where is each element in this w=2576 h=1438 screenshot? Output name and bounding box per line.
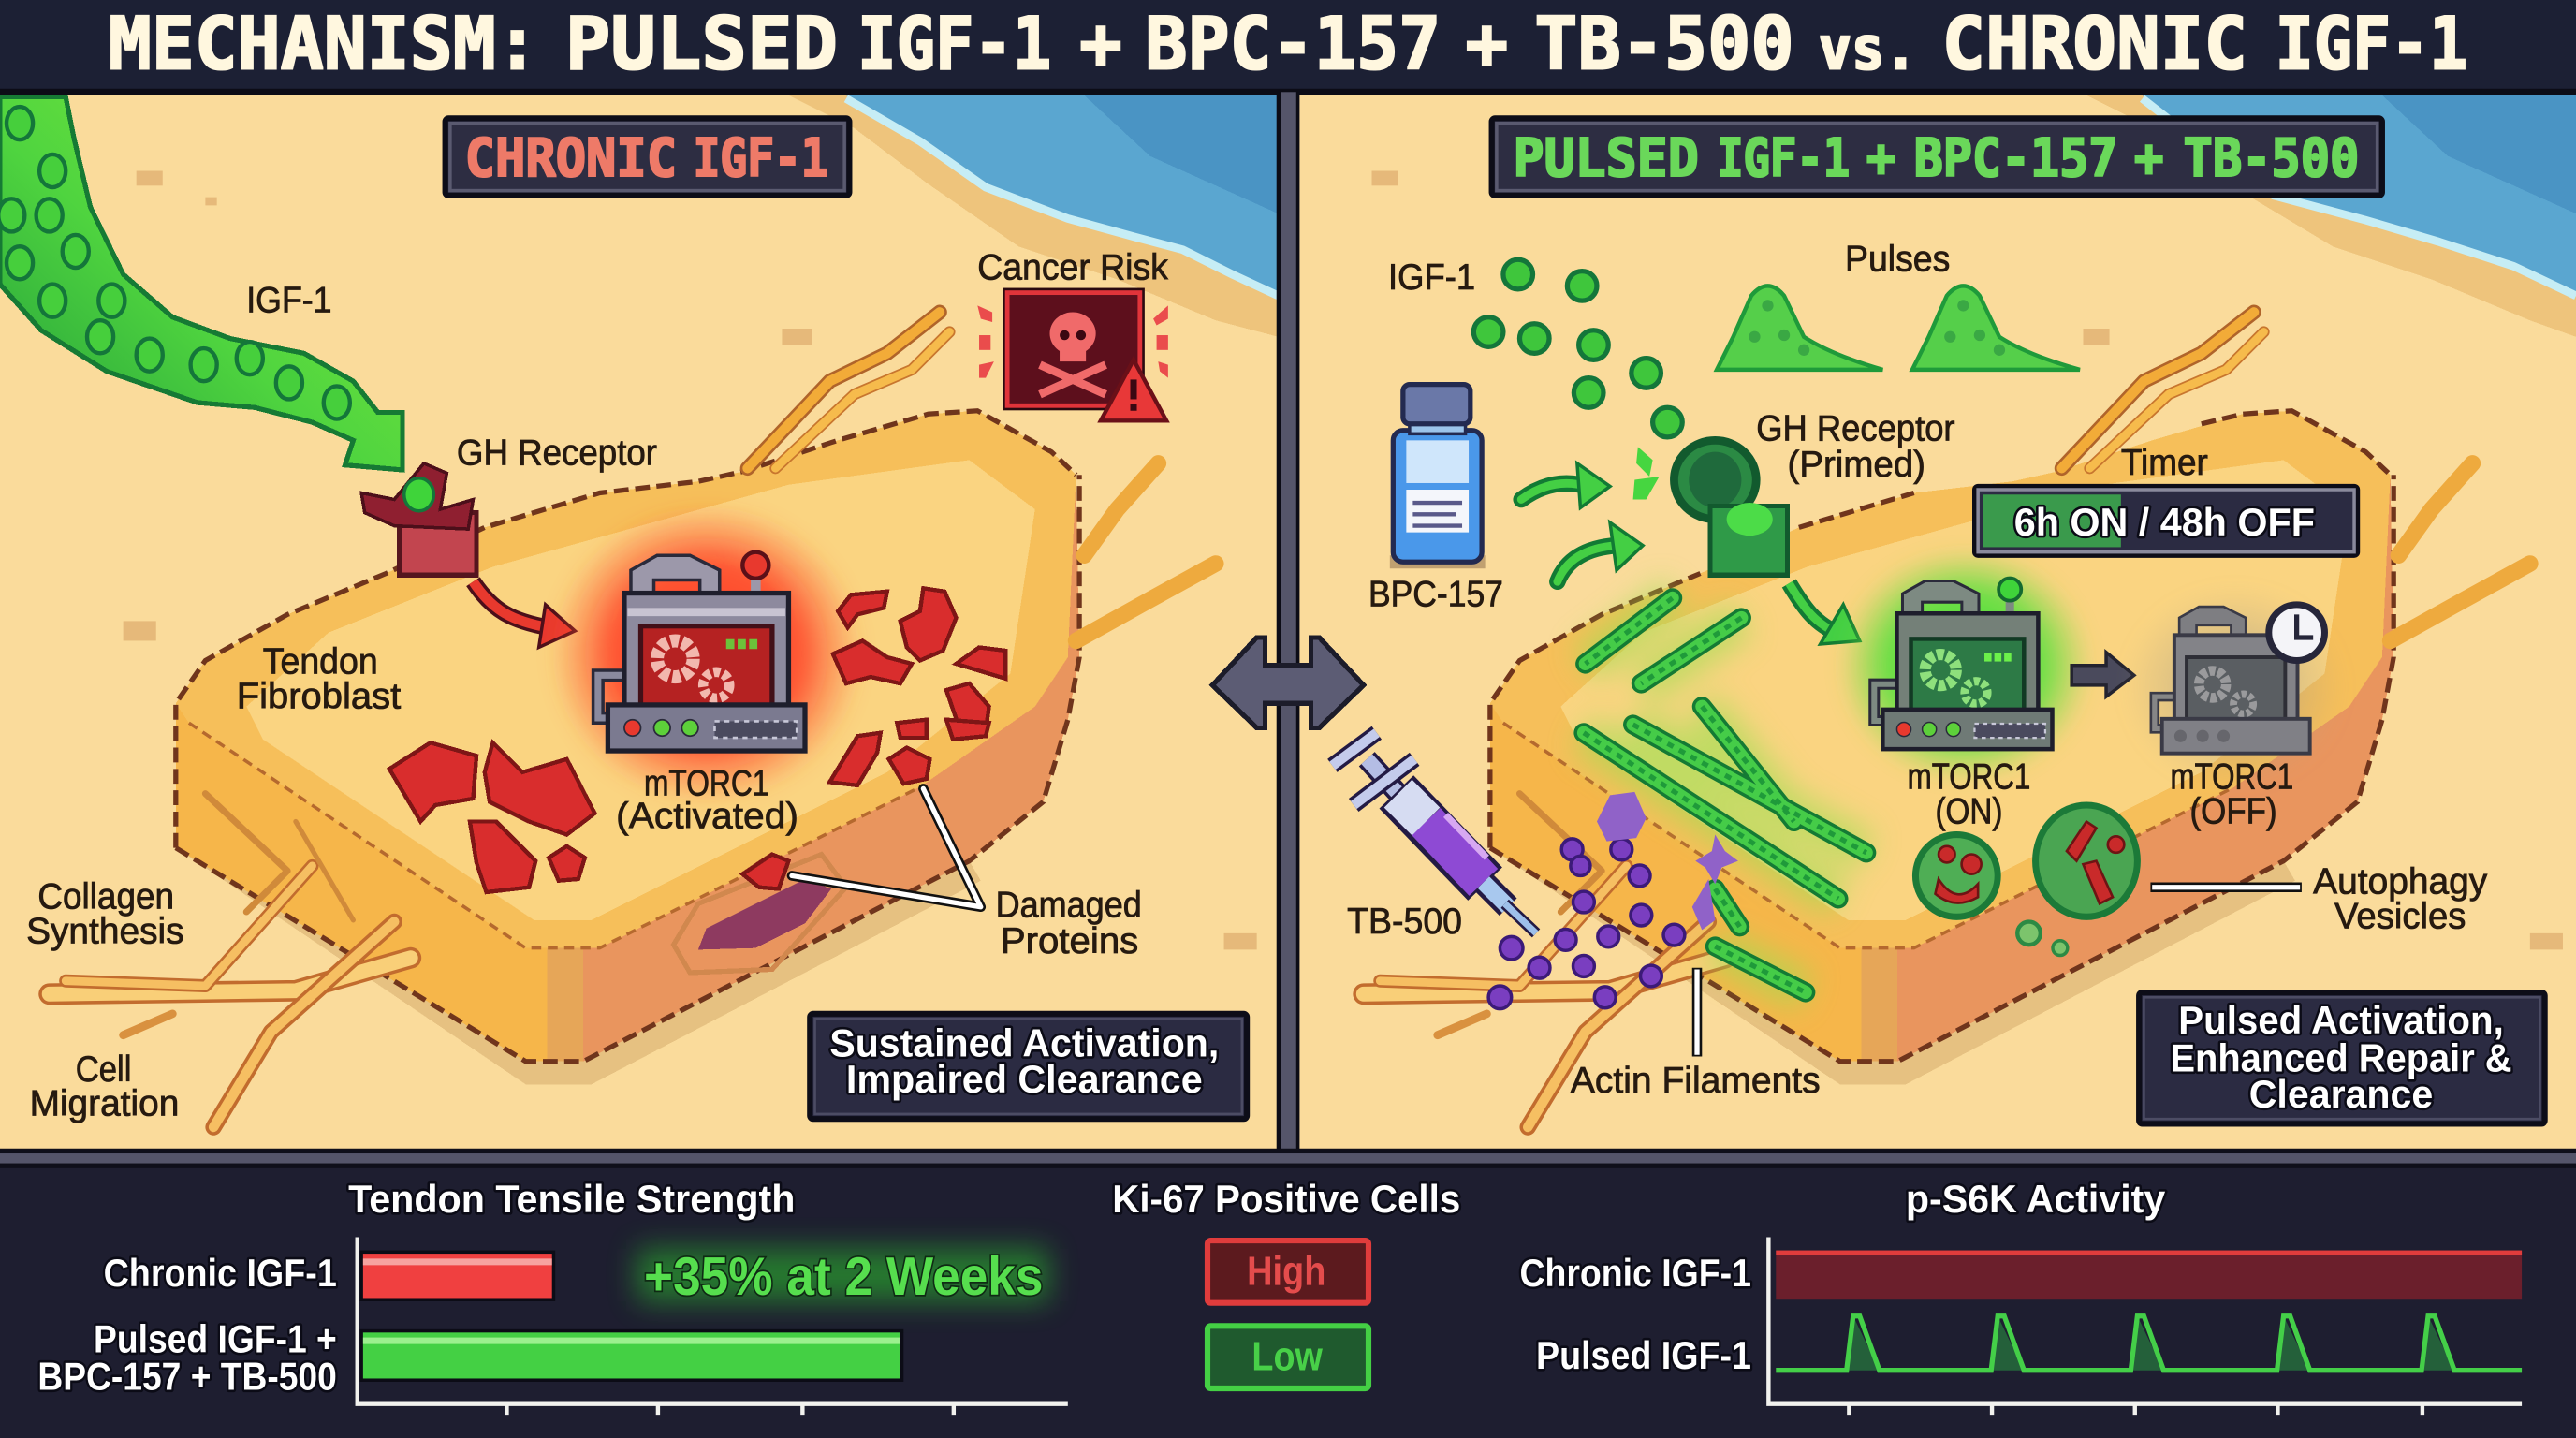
cell: primed fibroblast <box>1490 411 2393 1062</box>
label: IGF-1: IGF-1 <box>246 280 332 320</box>
label: mTORC1 off: mTORC1 <box>2170 756 2293 797</box>
label: actin filaments: Actin Filaments <box>1571 1061 1821 1101</box>
chart: tendon tensile strength <box>37 1177 1068 1415</box>
TB-500 particles <box>1488 839 1685 1009</box>
label: tendon fibroblast: Tendon <box>263 642 378 682</box>
TB-500 blobs <box>1597 792 1738 930</box>
cell shadow <box>176 848 981 1084</box>
panel: chronic IGF-1 <box>0 95 1278 1151</box>
icon: primed receptor <box>1633 440 1788 575</box>
autophagy vesicles <box>1915 805 2137 956</box>
callout: pulsed activation <box>2139 992 2545 1123</box>
sand specks <box>1372 171 2563 949</box>
sand specks <box>124 171 1257 949</box>
callout: pulsed activation: Clearance <box>2249 1072 2433 1116</box>
callout: +35%: +35% at 2 Weeks <box>644 1247 1043 1307</box>
label: mTORC1 on: (ON) <box>1936 791 2002 831</box>
axes <box>358 1238 1068 1415</box>
callout: sustained activation: Impaired Clearance <box>846 1057 1203 1101</box>
chart title: p-S6K Activity <box>1906 1177 2166 1221</box>
badge: low: Low <box>1251 1334 1324 1380</box>
label: GH receptor primed: GH Receptor <box>1756 408 1955 448</box>
label: mTORC1 activated <box>616 763 798 837</box>
wet sand <box>2086 95 2576 337</box>
callout line: autophagy <box>2150 885 2302 890</box>
title bar: PULSED <box>565 3 838 87</box>
row label: chronic: Chronic IGF-1 <box>1519 1251 1751 1295</box>
label: collagen synthesis: Synthesis <box>26 911 184 951</box>
label: collagen synthesis <box>26 877 184 951</box>
IGF-1 particles <box>1473 259 1682 437</box>
icon: mTORC1 machine activated <box>598 552 805 751</box>
row label: pulsed <box>37 1316 337 1399</box>
cell shadow <box>1490 848 2295 1084</box>
title bar: vs. <box>1819 14 1917 83</box>
label: autophagy vesicles <box>2313 862 2488 937</box>
fibers <box>1364 312 2530 1127</box>
arrow: IGF-1 flow <box>0 97 402 470</box>
title bar: MECHANISM: <box>109 3 539 87</box>
heading: pulsed combination: BPC-157 <box>1914 128 2117 189</box>
icon: cancer risk skull <box>977 289 1168 420</box>
title bar: + <box>1466 3 1508 87</box>
panel: pulsed combination <box>1299 95 2576 1151</box>
label: mTORC1 activated: (Activated) <box>616 797 798 837</box>
badge: low <box>1208 1326 1368 1388</box>
nucleus mark <box>674 855 846 973</box>
callout: pulsed activation: Enhanced Repair & <box>2170 1035 2512 1079</box>
icon: GH receptor <box>361 463 476 575</box>
title bar: + <box>1079 3 1122 87</box>
heading: chronic IGF-1: CHRONIC <box>465 128 677 189</box>
label: cell migration: Migration <box>30 1084 179 1124</box>
chart title: Tendon Tensile Strength <box>348 1177 795 1221</box>
water <box>846 95 1278 292</box>
title bar: IGF-1 <box>2276 3 2467 87</box>
axes <box>1768 1238 2522 1415</box>
mTORC1 on glow <box>1837 547 2093 784</box>
heading: chronic IGF-1: IGF-1 <box>694 128 828 189</box>
water <box>2143 95 2576 292</box>
heading: pulsed combination: PULSED <box>1513 128 1699 189</box>
label: collagen synthesis: Collagen <box>37 877 174 917</box>
label: GH receptor primed: (Primed) <box>1788 445 1925 485</box>
mTORC1 off glow <box>2123 585 2346 788</box>
icon: mTORC1 machine off <box>2155 607 2310 754</box>
row label: pulsed: Pulsed IGF-1 <box>1536 1333 1751 1377</box>
chart: p-S6K activity <box>1519 1177 2522 1415</box>
fibers <box>50 312 1216 1127</box>
label: BPC-157: BPC-157 <box>1368 575 1503 615</box>
label: damaged proteins <box>996 885 1142 961</box>
actin filaments <box>1584 598 1866 992</box>
arrow: receptor to mTORC1 <box>473 581 575 647</box>
chart title: Ki-67 Positive Cells <box>1112 1177 1460 1221</box>
label: mTORC1 activated: mTORC1 <box>644 763 768 803</box>
label: timer: Timer <box>2121 443 2208 483</box>
row label: chronic: Chronic IGF-1 <box>104 1251 337 1295</box>
heading: pulsed combination: + <box>1866 128 1895 189</box>
label: mTORC1 on: mTORC1 <box>1908 756 2030 797</box>
badge: high: High <box>1247 1248 1325 1294</box>
icon: clock <box>2269 605 2324 661</box>
label: damaged proteins: Proteins <box>1001 921 1138 961</box>
icon: syringe <box>1332 733 1536 933</box>
arrow: on to off <box>2071 653 2134 697</box>
title bar: IGF-1 <box>857 3 1051 87</box>
bar: pulsed <box>359 1329 903 1382</box>
actin glow <box>1584 594 1866 992</box>
heading: pulsed combination <box>1492 118 2382 196</box>
mTORC1 glow <box>549 503 864 805</box>
title bar <box>0 0 2576 95</box>
title bar: TB-500 <box>1534 3 1794 87</box>
line: pulsed activity <box>1776 1316 2522 1371</box>
title bar: BPC-157 <box>1145 3 1441 87</box>
divider strip <box>0 1149 2576 1168</box>
label: cell migration: Cell <box>76 1049 131 1090</box>
icon: BPC-157 vial <box>1390 385 1486 568</box>
callout: pulsed activation: Pulsed Activation, <box>2178 998 2504 1042</box>
label: GH receptor: GH Receptor <box>457 433 657 474</box>
label: mTORC1 off: (OFF) <box>2190 791 2277 831</box>
callout line: actin <box>1694 968 1700 1056</box>
label: cell migration <box>30 1049 179 1124</box>
heading: pulsed combination: TB-500 <box>2184 128 2359 189</box>
label: mTORC1 on <box>1908 756 2030 831</box>
icon: double arrow <box>1212 638 1364 727</box>
label: autophagy vesicles: Autophagy <box>2313 862 2488 902</box>
protein aggregates <box>389 588 1005 892</box>
arrow: receptor to mTORC1 on <box>1789 583 1860 644</box>
badge: high <box>1208 1240 1368 1303</box>
label: cancer risk: Cancer Risk <box>977 247 1169 287</box>
chart: Ki-67 positive cells <box>1112 1177 1460 1388</box>
row label: pulsed: Pulsed IGF-1 + <box>94 1316 337 1360</box>
icon: mTORC1 machine on <box>1874 579 2052 749</box>
label: pulses: Pulses <box>1845 240 1950 280</box>
callout: sustained activation: Sustained Activation, <box>829 1020 1219 1064</box>
bar: chronic <box>359 1251 555 1301</box>
cell: tendon fibroblast <box>176 411 1079 1062</box>
title bar: CHRONIC <box>1942 3 2247 87</box>
timer bar: 6h ON / 48h OFF <box>2014 500 2315 544</box>
band: sustained activity <box>1776 1251 2522 1299</box>
timer bar <box>1975 486 2358 555</box>
label: mTORC1 off <box>2170 756 2293 831</box>
heading: pulsed combination: IGF-1 <box>1717 128 1850 189</box>
label: TB-500: TB-500 <box>1347 902 1462 942</box>
label: IGF-1: IGF-1 <box>1388 257 1475 298</box>
row label: pulsed: BPC-157 + TB-500 <box>37 1355 337 1399</box>
label: tendon fibroblast: Fibroblast <box>237 676 402 716</box>
label: damaged proteins: Damaged <box>996 885 1142 925</box>
heading: chronic IGF-1 <box>446 118 849 196</box>
panel divider <box>1277 92 1299 1153</box>
label: autophagy vesicles: Vesicles <box>2334 897 2466 937</box>
label: tendon fibroblast <box>237 642 402 716</box>
arrows: BPC-157 to receptor <box>1521 463 1643 581</box>
callout: sustained activation <box>810 1014 1247 1119</box>
label: GH receptor primed <box>1756 408 1955 485</box>
callout lines: damaged proteins <box>792 788 981 907</box>
wet sand <box>788 95 1278 337</box>
pulse shapes <box>1717 286 2080 370</box>
heading: pulsed combination: + <box>2134 128 2163 189</box>
